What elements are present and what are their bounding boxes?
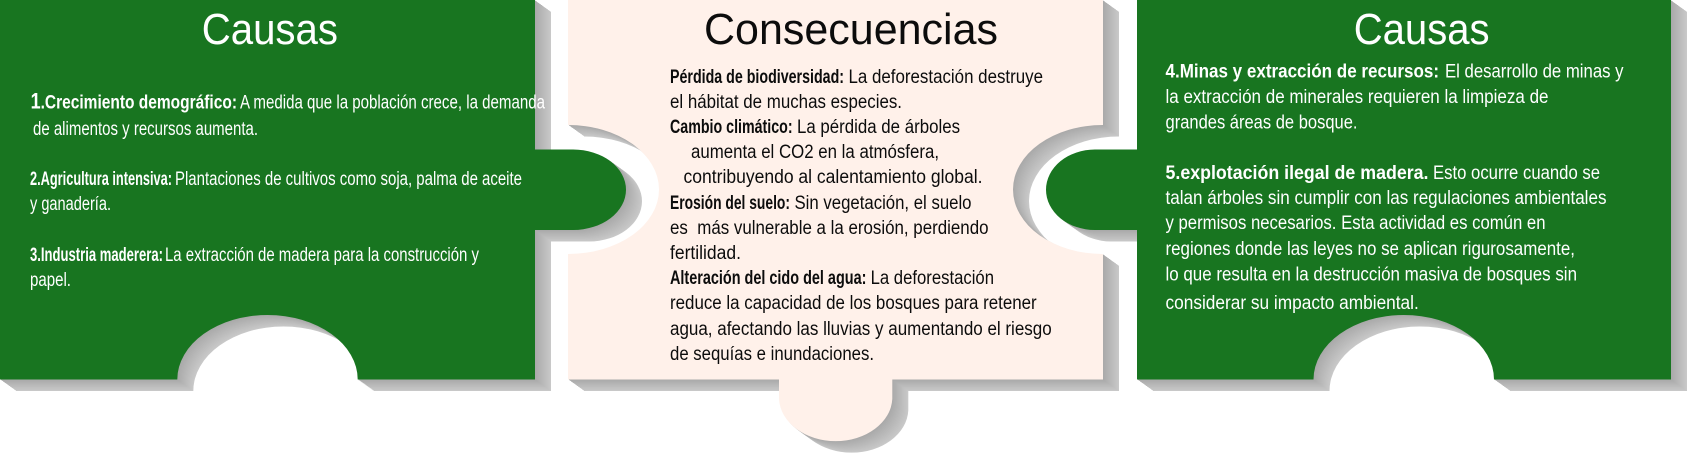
text block: consecuencias list: contribuyendo al calentamiento global. (684, 167, 982, 188)
text block: causas 1 to 3: 3.Industria maderera: (30, 245, 163, 266)
text block: consecuencias list: Cambio climático: (670, 117, 793, 138)
puzzle piece: causas right (1046, 0, 1671, 380)
text block: causas 4 and 5: la extracción de minerales requieren la limpieza de (1166, 87, 1548, 108)
text block: consecuencias list: agua, afectando las lluvias y aumentando el riesgo (670, 319, 1052, 340)
text block: causas 4 and 5: grandes áreas de bosque. (1166, 113, 1358, 134)
puzzle piece shadow: consecuencias (569, 1, 1119, 453)
heading: Causas left: Causas (202, 5, 338, 54)
panel: causas 1-3 (0, 0, 642, 391)
text block: causas 4 and 5: 5.explotación ilegal de madera. (1166, 163, 1428, 184)
text block: causas 4 and 5: lo que resulta en la destrucción masiva de bosques sin (1166, 265, 1577, 286)
heading: Causas right: Causas (1354, 5, 1490, 54)
text block: consecuencias list: Erosión del suelo: (670, 193, 790, 214)
text block: causas 4 and 5: Esto ocurre cuando se (1433, 163, 1600, 184)
text block: causas 1 to 3: de alimentos y recursos aumenta. (33, 119, 258, 140)
text block: causas 1 to 3: Plantaciones de cultivos como soja, palma de aceite (175, 169, 522, 190)
text block: consecuencias list: La pérdida de árboles (797, 117, 960, 138)
text block: causas 4 and 5: y permisos necesarios. Esta actividad es común en (1166, 213, 1546, 234)
text block: causas 4 and 5: 4.Minas y extracción de recursos: (1166, 62, 1439, 83)
puzzle piece shadow: causas left (1, 1, 642, 391)
panel: consecuencias (568, 0, 1119, 453)
text block: consecuencias list: Pérdida de biodiversidad: (670, 67, 844, 88)
text block: causas 1 to 3: y ganadería. (30, 194, 111, 215)
text block: consecuencias list: el hábitat de muchas especies. (670, 92, 902, 113)
panel: causas 4-5 (1046, 0, 1687, 391)
text block: causas 1 to 3: La extracción de madera para la construcción y (165, 245, 479, 266)
puzzle piece: causas left (0, 0, 626, 380)
heading: Consecuencias: Consecuencias (704, 5, 998, 54)
text block: causas 1 to 3: A medida que la población crece, la demanda (240, 93, 545, 114)
text block: causas 1 to 3: papel. (30, 270, 71, 291)
text block: consecuencias list: Alteración del cido del agua: (670, 268, 866, 289)
text block: consecuencias list: fertilidad. (670, 243, 741, 264)
text block: consecuencias list: La deforestación destruye (848, 67, 1043, 88)
text block: consecuencias list: de sequías e inundaciones. (670, 344, 874, 365)
text block: consecuencias list (670, 67, 1052, 365)
text block: consecuencias list: reduce la capacidad de los bosques para retener (670, 293, 1037, 314)
text block: causas 4 and 5: El desarrollo de minas y (1445, 62, 1624, 83)
puzzle piece shadow: causas right (1047, 1, 1687, 391)
text block: causas 4 and 5: regiones donde las leyes no se aplican rigurosamente, (1166, 239, 1575, 260)
text block: consecuencias list: Sin vegetación, el suelo (794, 193, 972, 214)
text block: causas 4 and 5 (1166, 62, 1624, 314)
text block: causas 1 to 3 (30, 89, 545, 291)
text block: consecuencias list: aumenta el CO2 en la atmósfera, (691, 142, 939, 163)
text block: causas 1 to 3: 2.Agricultura intensiva: (30, 169, 172, 190)
text block: consecuencias list: es más vulnerable a la erosión, perdiendo (670, 218, 988, 239)
puzzle piece: consecuencias (568, 0, 1103, 441)
text block: consecuencias list: La deforestación (871, 268, 994, 289)
text block: causas 4 and 5: talan árboles sin cumplir con las regulaciones ambientales (1166, 188, 1606, 209)
text block: causas 1 to 3: 1.Crecimiento demográfico: (31, 89, 237, 114)
text block: causas 4 and 5: considerar su impacto ambiental. (1166, 293, 1419, 314)
